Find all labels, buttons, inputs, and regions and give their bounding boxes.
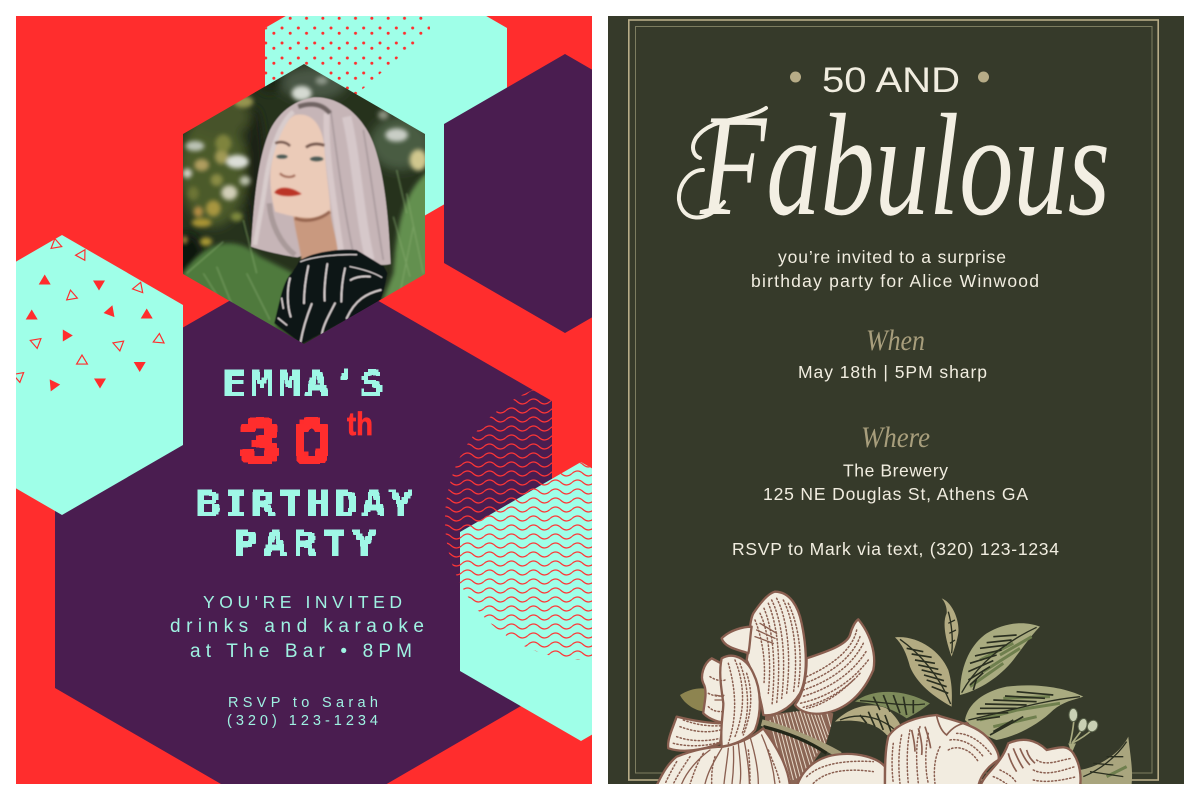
front hair strands <box>255 104 383 260</box>
stem <box>762 723 840 755</box>
heading: 50 AND <box>790 67 989 92</box>
double border frame <box>629 20 1158 780</box>
hexagon: teal lower right <box>460 462 592 741</box>
hatched brown petal behind stem <box>765 711 833 784</box>
heading: PARTY: PARTY <box>233 524 377 564</box>
text: venue: 125 NE Douglas St, Athens GA <box>763 484 1028 504</box>
text: RSVP <box>227 695 378 729</box>
heading: th superscript: th <box>347 406 373 442</box>
leaves <box>835 598 1132 784</box>
hexagon: large purple <box>55 300 552 784</box>
text: RSVP: RSVP to Mark via text, (320) 123-1234 <box>732 539 1059 559</box>
panel: 50 and Fabulous invitation <box>608 16 1184 787</box>
text: invitation details: drinks and karaoke <box>170 616 424 637</box>
heading: BIRTHDAY: BIRTHDAY <box>196 484 414 524</box>
text: invitation line: you’re invited to a surprise <box>778 247 1006 267</box>
flower: centre <box>885 715 999 787</box>
heading: Fabulous <box>676 106 1107 220</box>
text: invitation details: at The Bar • 8PM <box>190 641 412 662</box>
filled triangles <box>26 274 153 391</box>
outlined triangles <box>13 238 165 383</box>
dark green background <box>608 16 1184 784</box>
heading: 30: 30 <box>240 407 331 478</box>
heading: 50 AND: 50 AND <box>822 61 960 100</box>
sepal behind left flower <box>680 688 710 712</box>
red background <box>16 16 592 784</box>
flower: left, magnolia <box>656 592 874 787</box>
neck <box>293 208 338 262</box>
text: Where heading: Where <box>861 421 930 454</box>
photo: woman in hexagon <box>183 64 425 344</box>
leaf veins <box>840 612 1127 777</box>
hexagon: teal left with triangles <box>0 235 183 515</box>
flower: right <box>980 740 1081 787</box>
heading: EMMA'S: EMMA’S <box>222 364 384 404</box>
hexagon: purple top right <box>444 54 592 333</box>
illustration: engraved flowers and leaves <box>656 592 1132 787</box>
face <box>270 115 330 218</box>
text: date: May 18th | 5PM sharp <box>798 362 987 382</box>
green leaf shading <box>970 637 1127 777</box>
text: venue <box>763 460 1028 504</box>
text: RSVP: (320) 123-1234 <box>227 713 378 729</box>
flower: bottom centre <box>797 754 885 787</box>
text: invitation details: YOU'RE INVITED <box>203 592 402 612</box>
text: RSVP: RSVP to Sarah <box>228 695 378 711</box>
flower: left stipple shading <box>665 598 868 784</box>
foliage bokeh <box>170 67 430 280</box>
text: When heading: When <box>866 324 925 357</box>
hair back <box>251 97 391 265</box>
swash on F <box>679 108 766 218</box>
hexagon: teal top with polka dots <box>265 16 507 216</box>
text: invitation details <box>170 596 424 657</box>
grass <box>180 170 430 347</box>
text: invitation line: birthday party for Alice Winwood <box>751 271 1039 291</box>
text: invitation line <box>751 247 1039 291</box>
text: venue: The Brewery <box>843 460 948 480</box>
panel: Emma's 30th birthday invitation <box>16 16 592 784</box>
buds <box>1068 708 1100 753</box>
eyes, brows, nose, lips <box>274 142 330 220</box>
striped shirt <box>274 250 387 344</box>
wave pattern circle <box>445 390 592 660</box>
